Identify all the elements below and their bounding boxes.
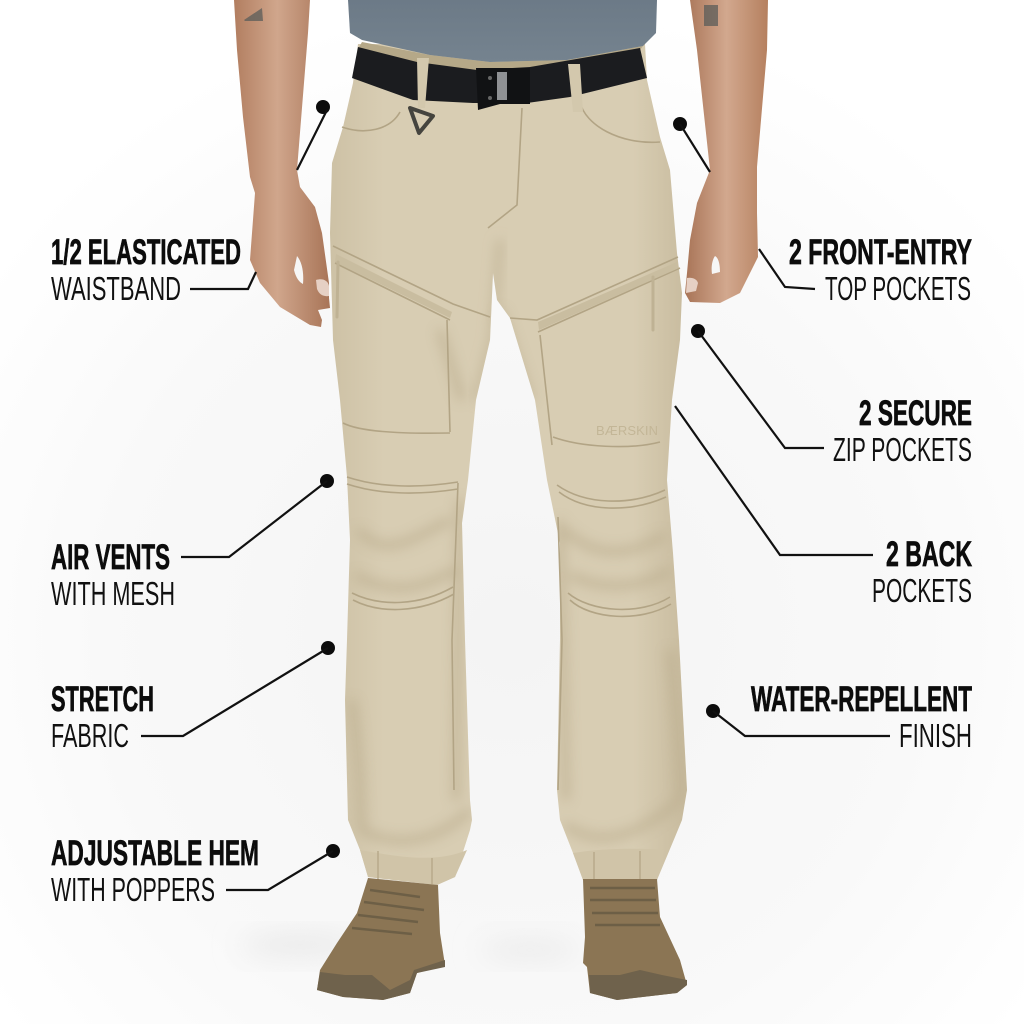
- callout: top pockets: [673, 117, 972, 307]
- trouser shading: [352, 240, 680, 840]
- callout: air vents: [51, 474, 334, 612]
- trouser seams and pockets: [333, 102, 680, 790]
- callout: air vents: AIR VENTS: [51, 538, 170, 577]
- fingernails: [316, 278, 698, 296]
- callout: water repellent: [706, 680, 972, 754]
- floor shadows: [240, 935, 580, 958]
- zip pockets: [335, 254, 679, 330]
- callout: back pockets: 2 BACK: [886, 535, 972, 574]
- callout: water repellent: FINISH: [899, 717, 972, 754]
- left arm and hand: [234, 0, 330, 327]
- callout: waistband: WAISTBAND: [51, 270, 181, 307]
- callout: waistband: [51, 100, 330, 307]
- trousers: [330, 44, 687, 885]
- callout: stretch: FABRIC: [51, 717, 129, 754]
- buckle: [476, 68, 530, 110]
- right arm and hand: [685, 0, 768, 303]
- zip pullers: [337, 262, 653, 330]
- callout: stretch: STRETCH: [51, 680, 154, 719]
- cuffs: [360, 849, 664, 885]
- callout: hem: WITH POPPERS: [51, 871, 215, 908]
- callout: hem: ADJUSTABLE HEM: [51, 834, 259, 873]
- callout: stretch: [51, 641, 335, 754]
- belt: [352, 47, 647, 103]
- logo: BÆRSKIN: [596, 423, 658, 438]
- hand gaps: [294, 256, 720, 284]
- photo: trousers model: [234, 0, 768, 1000]
- right boot: [583, 879, 687, 1000]
- shirt: [348, 0, 657, 62]
- callout: hem: [51, 834, 340, 908]
- left boot: [317, 878, 445, 1000]
- callout: air vents: WITH MESH: [51, 575, 175, 612]
- tattoos: [244, 5, 718, 26]
- belt loops and D-ring: [417, 58, 583, 112]
- khaki waistband strip: [358, 42, 643, 72]
- callout: zip pockets: [691, 324, 972, 468]
- callout: back pockets: [675, 406, 972, 609]
- callout: waistband: 1/2 ELASTICATED: [51, 233, 241, 272]
